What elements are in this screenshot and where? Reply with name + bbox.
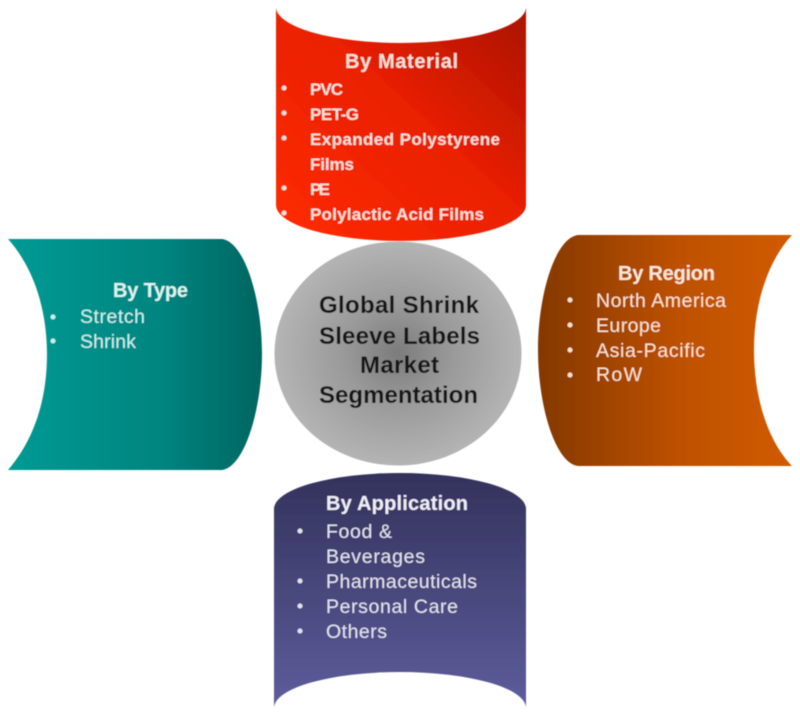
list: materials <box>282 80 500 224</box>
heading: by application: By Application <box>326 493 468 515</box>
list: regions: Europe <box>596 315 661 337</box>
panel shape: purple cylinder <box>274 473 526 708</box>
panel: by region <box>538 235 792 466</box>
list: regions: RoW <box>596 364 643 386</box>
list: materials: Expanded Polystyrene <box>310 130 500 149</box>
title: market segmentation <box>319 292 480 409</box>
list: applications: Food & <box>326 521 392 543</box>
heading: by type: By Type <box>113 280 188 302</box>
panel: by application <box>274 473 526 708</box>
list: applications: Others <box>326 621 387 643</box>
panel shape: orange cylinder <box>538 235 792 466</box>
heading: by material: By Material <box>345 51 458 73</box>
list: materials: PET-G <box>310 105 359 124</box>
title: market segmentation: Market <box>360 352 439 379</box>
list: types <box>50 306 145 353</box>
list: applications <box>298 521 477 643</box>
heading: by region: By Region <box>618 263 715 285</box>
title: market segmentation: Segmentation <box>319 382 478 409</box>
panel: by type <box>8 239 262 470</box>
list: types: Stretch <box>80 306 145 328</box>
panel: by material <box>276 7 526 241</box>
list: materials: PE <box>310 180 330 199</box>
panel shape: teal cylinder <box>8 239 262 470</box>
panel shape: red cylinder <box>276 7 526 241</box>
title: market segmentation: Global Shrink <box>319 292 480 319</box>
list: applications: Pharmaceuticals <box>326 571 477 593</box>
list: materials: PVC <box>310 80 343 99</box>
title: market segmentation: Sleeve Labels <box>319 323 480 350</box>
list: regions: North America <box>596 290 726 312</box>
list: regions: Asia-Pacific <box>596 340 705 362</box>
list: applications: Personal Care <box>326 596 458 618</box>
center ellipse with title <box>274 242 522 466</box>
list: types: Shrink <box>80 331 136 353</box>
ellipse: gray disc <box>274 242 522 466</box>
list: regions <box>568 290 726 386</box>
list: materials: Polylactic Acid Films <box>310 205 484 224</box>
list: applications: Beverages <box>326 546 425 568</box>
list: materials: Films <box>310 155 354 174</box>
